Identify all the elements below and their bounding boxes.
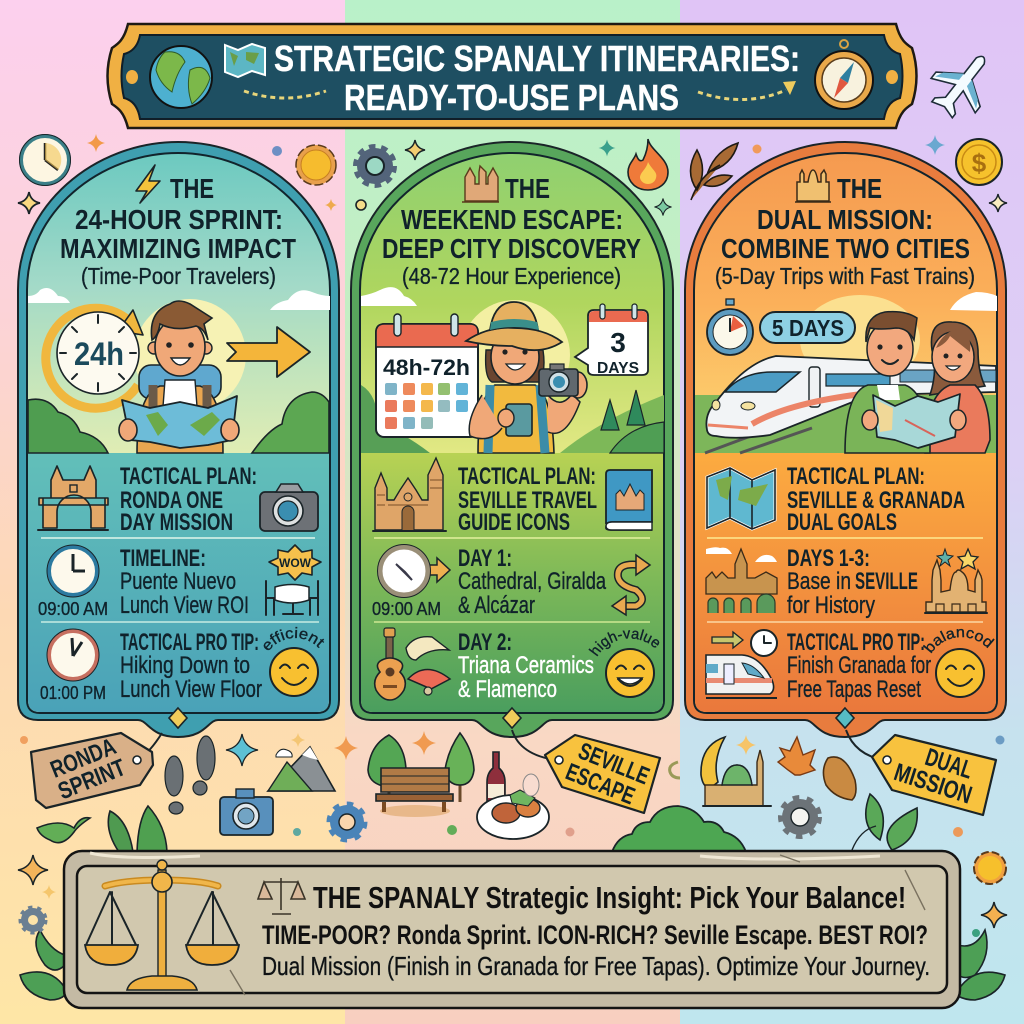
top decorations: right column: $ (972, 148, 987, 178)
icon: granada mosque (925, 560, 987, 613)
decorations: right column bottom (612, 735, 1004, 852)
illustration: traveler with map and clock (28, 288, 330, 453)
icon: tree left (368, 735, 406, 800)
icon: calendar 48h-72h (376, 314, 478, 437)
panel: 24-hour sprint (17, 141, 340, 738)
arrow: dashed right (698, 81, 796, 100)
icon: leaves (852, 794, 917, 850)
icon: golden scales (85, 860, 239, 990)
row: day 1 (372, 544, 650, 619)
row: pro tip (705, 628, 995, 703)
text block: DUAL GOALS (787, 509, 897, 536)
text block: DAYS 1-3: (787, 545, 870, 572)
illustration: traveler with calendars (361, 287, 664, 453)
icon: wow burst (269, 545, 321, 580)
label: efficient: efficient (264, 626, 324, 650)
icon: 24h clock: 24h (74, 336, 124, 372)
row: pro tip: 01:00 PM (40, 683, 106, 703)
icon: arrow with clock (712, 630, 777, 656)
icon: cathedral dome (795, 170, 831, 202)
text block: TACTICAL PLAN: (120, 463, 257, 490)
icon: ronda bridge (38, 466, 108, 530)
heading: main title: STRATEGIC SPANALY ITINERARIES: (274, 38, 800, 79)
icon: guitar (375, 628, 405, 700)
text block: DAY 2: (458, 629, 512, 656)
row: timeline: 09:00 AM (38, 599, 108, 619)
icon: world map (707, 468, 775, 529)
arms (469, 394, 580, 439)
icon: ceramic tile (406, 637, 449, 660)
tag: ronda sprint: RONDA (47, 733, 120, 784)
row: tactical plan (38, 463, 318, 536)
tag: dual mission: DUAL (922, 743, 976, 785)
icon: diamond (169, 708, 187, 728)
heading: panel 3 title: (5-Day Trips with Fast Trains) (715, 263, 975, 289)
heading: panel 2 title: WEEKEND ESCAPE: (401, 204, 623, 235)
text block: Lunch View ROI (120, 592, 249, 619)
top decorations: middle column (356, 139, 672, 216)
text block: TACTICAL PRO TIP: (787, 629, 925, 656)
icon: blue gear (330, 805, 364, 839)
figure: woman with camera (466, 302, 587, 453)
leaves left and right (20, 930, 1005, 1000)
tag: ronda sprint (31, 733, 162, 808)
text block (120, 545, 249, 619)
text block: Finish Granada for (787, 652, 931, 679)
text block: & Alcázar (458, 592, 535, 619)
row: pro tip (40, 626, 324, 703)
text block: Triana Ceramics (458, 652, 594, 679)
row: tactical plan (707, 463, 965, 536)
icon: tapas plate (477, 774, 549, 839)
panel: dual mission (684, 141, 1007, 738)
icon: brown leaf (823, 757, 856, 800)
icon: s-route arrow (612, 555, 650, 615)
icon: airplane (920, 40, 1005, 127)
title banner (108, 24, 916, 128)
text block: TACTICAL PLAN: (458, 463, 596, 490)
text block: GUIDE ICONS (458, 509, 570, 536)
text block: SEVILLE (855, 568, 918, 595)
icon: smiley balanced (936, 649, 984, 697)
decorations: left column bottom (20, 733, 364, 852)
icon: green bush (612, 806, 746, 852)
icon: calendar 48h-72h: 48h-72h (383, 355, 470, 380)
heading: panel 3 title: DUAL MISSION: (757, 204, 933, 235)
icon: seville skyline (706, 547, 777, 613)
decorations: middle column bottom (368, 731, 680, 839)
text block: TACTICAL PLAN: (787, 463, 925, 490)
row: day 2 (374, 627, 660, 703)
text block (120, 629, 262, 703)
panel: weekend escape (350, 141, 674, 738)
label: high-value: high-value (588, 629, 660, 656)
icon: small scales (258, 878, 305, 914)
heading: panel 1 title: (Time-Poor Travelers) (81, 263, 276, 289)
icon: seville cathedral (373, 458, 446, 531)
decorations: bottom edges (18, 852, 1007, 937)
heading: panel 3 title: THE (837, 173, 882, 204)
heading: panel 3 title (715, 173, 975, 289)
icon: stars (937, 549, 978, 569)
text block: DAY MISSION (120, 509, 233, 536)
icon: clock 09:00 (47, 545, 99, 597)
icon: train (706, 655, 777, 698)
icon: leaves (108, 806, 167, 852)
figure: boy (119, 301, 239, 453)
heading: panel 2 title (382, 173, 641, 289)
top decorations: left column (18, 134, 337, 214)
text block: SEVILLE TRAVEL (458, 487, 597, 514)
icon: 24h clock (46, 308, 143, 408)
text block (458, 545, 606, 619)
icon: calendar 3 days: DAYS (597, 360, 639, 377)
icon: mountain (268, 747, 335, 791)
heading: panel 1 title (60, 173, 296, 289)
label: balanced: balancod (922, 628, 995, 654)
icon: diamond (503, 708, 521, 728)
icon: wow burst: WOW (279, 556, 312, 570)
tag: dual mission (846, 730, 996, 815)
icon: footprints (165, 736, 215, 814)
icon: calendar 3 days (575, 304, 648, 377)
icon: crescent mosque (701, 737, 771, 806)
heading: panel 3 title: COMBINE TWO CITIES (721, 233, 970, 264)
tag: ronda sprint: SPRINT (54, 754, 130, 805)
text block: TACTICAL PRO TIP: (120, 629, 259, 656)
icon: bench (376, 768, 453, 817)
heading: panel 1 title: MAXIMIZING IMPACT (60, 233, 296, 264)
heading: panel 1 title: THE (170, 173, 214, 204)
heading: main title (274, 38, 800, 118)
panel: strategic insight stone plaque (20, 851, 1005, 1008)
text block: & Flamenco (458, 676, 557, 703)
text block: DAY 1: (458, 545, 512, 572)
text block: Hiking Down to (120, 652, 250, 679)
tag: seville escape: SEVILLE (574, 738, 653, 790)
icon: smiley efficient (270, 648, 318, 696)
icon: camera (260, 484, 318, 531)
icon: castle (462, 166, 499, 202)
text block (787, 629, 931, 703)
top decorations: right column (690, 135, 1007, 212)
icon: high-speed train (705, 356, 996, 453)
row: days 1-3 (706, 545, 987, 619)
text block: TIMELINE: (120, 545, 206, 572)
text block: Free Tapas Reset (787, 676, 921, 703)
icon: lightning bolt (136, 165, 160, 203)
icon: swirl (670, 762, 680, 778)
heading: panel 1 title: 24-HOUR SPRINT: (75, 204, 283, 235)
icon: diamond (836, 708, 854, 728)
figure: couple with map (845, 312, 990, 453)
text block (787, 545, 918, 619)
tag: seville escape: ESCAPE (562, 758, 639, 810)
text block: RONDA ONE (120, 487, 223, 514)
icon: wine bottle (487, 752, 505, 808)
heading: panel 2 title: THE (505, 173, 550, 204)
text block (120, 463, 257, 536)
icon: guide book (606, 470, 652, 530)
icon: sparkle (226, 734, 258, 766)
icon: compass clock with arrow (378, 544, 450, 598)
text block (458, 629, 594, 703)
icon: calendar 3 days: 3 (610, 327, 626, 358)
icon: grey gear (782, 799, 818, 835)
icon: clock 01:00 (47, 629, 99, 681)
heading: panel 2 title: (48-72 Hour Experience) (402, 263, 621, 289)
text block (787, 463, 965, 536)
icon: compass (815, 40, 873, 109)
illustration: train and couple (695, 292, 997, 453)
tag: seville escape (512, 730, 660, 813)
row: timeline (38, 545, 321, 619)
icon: maple leaf (778, 737, 815, 775)
text block: Lunch View Floor (120, 676, 262, 703)
text block: Puente Nuevo (120, 568, 236, 595)
icon: blue camera (220, 789, 273, 835)
icon: leaf (37, 818, 90, 843)
icon: fan (408, 670, 450, 695)
icon: globe (150, 46, 212, 108)
text block: for History (787, 592, 875, 619)
tag: dual mission: MISSION (891, 758, 975, 810)
text block: Cathedral, Giralda (458, 568, 606, 595)
row: tactical plan (373, 458, 652, 536)
heading: main title: READY-TO-USE PLANS (344, 77, 679, 118)
icon: map (225, 44, 265, 77)
icon: lunch table (266, 581, 318, 615)
text block (458, 463, 597, 536)
icon: tree right (445, 733, 474, 802)
row: day 1: 09:00 AM (372, 599, 441, 619)
icon: smiley high-value (606, 649, 654, 697)
text block: Base in (787, 568, 851, 595)
icon: stopwatch (707, 299, 753, 355)
text: insight copy (262, 880, 930, 981)
icon: arrow right (227, 327, 310, 377)
badge: 5 days: 5 DAYS (772, 315, 844, 341)
heading: panel 2 title: DEEP CITY DISCOVERY (382, 233, 641, 264)
arrow: dashed left (244, 91, 326, 98)
